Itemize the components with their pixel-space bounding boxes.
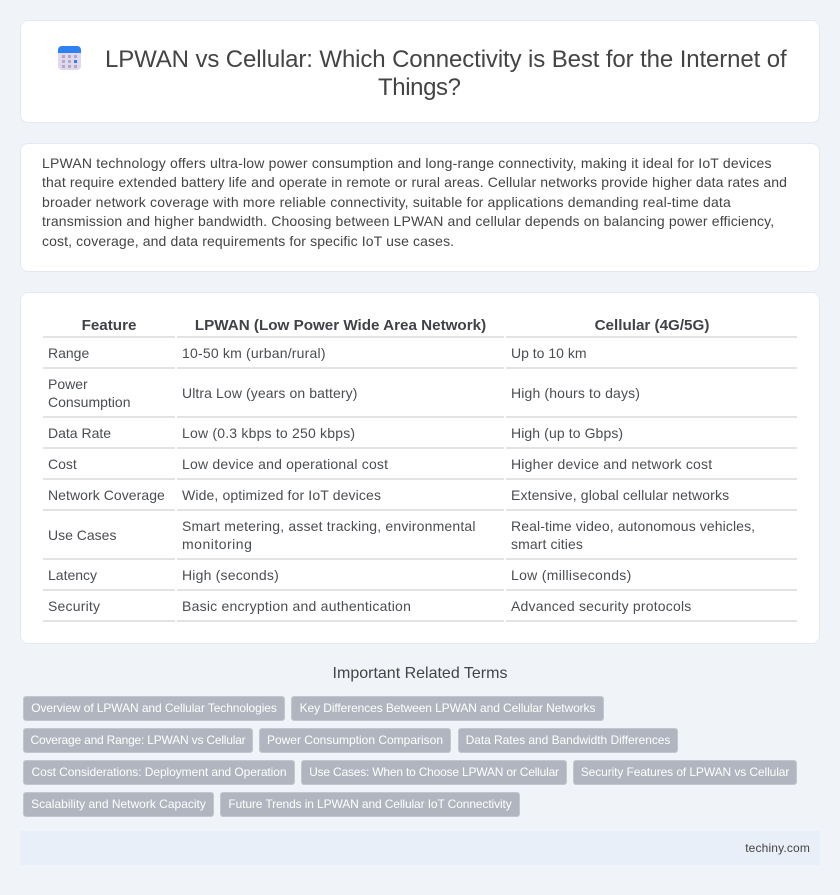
row: Latency: Latency [48, 567, 97, 583]
row: Range Cellular: Up to 10 km [511, 345, 586, 361]
row: Power Consumption [48, 376, 130, 410]
tag [23, 792, 214, 817]
footer bar [20, 831, 820, 865]
intro paragraph: that require extended battery life and operate in remote or rural areas. Cellular networks provide higher data rates and [42, 174, 787, 190]
tag: Cost Considerations: Deployment and Operation [32, 765, 286, 779]
panel: comparison table card [20, 292, 820, 644]
row: Data Rate Cellular: High (up to Gbps) [511, 425, 623, 441]
header: LPWAN: LPWAN (Low Power Wide Area Network) [195, 317, 486, 334]
tag: Key Differences Between LPWAN and Cellular Networks [300, 701, 595, 715]
tag: Power Consumption Comparison [267, 733, 443, 747]
row: Data Rate: Data Rate [48, 425, 111, 441]
intro paragraph [42, 155, 787, 249]
title: LPWAN vs Cellular: Which Connectivity is Best for the Internet of [105, 46, 787, 73]
tag: Future Trends in LPWAN and Cellular IoT Connectivity [228, 797, 512, 811]
tag [23, 696, 285, 721]
tag: Data Rates and Bandwidth Differences [466, 733, 670, 747]
row: Latency Cellular: Low (milliseconds) [511, 567, 632, 583]
icon: calendar [58, 46, 81, 70]
row: Security LPWAN: Basic encryption and authentication [182, 598, 411, 614]
row: Use Cases LPWAN: monitoring [182, 536, 252, 552]
row: Network LPWAN: Wide, optimized for IoT devices [182, 487, 381, 503]
row: Use Cases Cellular: smart cities [511, 536, 583, 552]
tag [291, 696, 604, 721]
header: Feature: Feature [82, 317, 136, 334]
row: Network Coverage: Network Coverage [48, 487, 165, 503]
row: Range LPWAN: 10-50 km (urban/rural) [182, 345, 326, 361]
row: Network Cellular: Extensive, global cellular networks [511, 487, 729, 503]
row: Security Cellular: Advanced security protocols [511, 598, 692, 614]
row: Latency LPWAN: High (seconds) [182, 567, 279, 583]
row: Use Cases LPWAN [182, 518, 476, 552]
comparison table [43, 317, 797, 622]
intro paragraph: transmission and higher bandwidth. Choosing between LPWAN and cellular depends on balancing power efficiency, [42, 213, 774, 229]
row: Cost: Cost [48, 456, 77, 472]
header: Cellular: Cellular (4G/5G) [595, 317, 709, 334]
row: Use Cases Cellular: Real-time video, autonomous vehicles, [511, 518, 755, 534]
row: Power Consumption: Power [48, 376, 88, 392]
tag [301, 760, 567, 785]
tag: Scalability and Network Capacity [31, 797, 206, 811]
row: Security: Security [48, 598, 100, 614]
row: Power LPWAN: Ultra Low (years on battery) [182, 385, 358, 401]
tag: Security Features of LPWAN vs Cellular [581, 765, 789, 779]
footer text: techiny.com [745, 841, 810, 855]
intro paragraph: cost, coverage, and data requirements for specific IoT use cases. [42, 233, 454, 249]
tag: Use Cases: When to Choose LPWAN or Cellular [309, 765, 559, 779]
tag [220, 792, 520, 817]
row: Data Rate LPWAN: Low (0.3 kbps to 250 kbps) [182, 425, 355, 441]
tag: Coverage and Range: LPWAN vs Cellular [31, 733, 245, 747]
row: Use Cases Cellular [511, 518, 755, 552]
row: Cost Cellular: Higher device and network cost [511, 456, 712, 472]
title: Things? [378, 74, 461, 101]
intro paragraph: broader network coverage with more reliable connectivity, suitable for applications demanding real-time data [42, 194, 731, 210]
row: Use Cases LPWAN: Smart metering, asset tracking, environmental [182, 518, 476, 534]
row: Use Cases: Use Cases [48, 527, 116, 543]
related terms heading: Important Related Terms [333, 665, 507, 682]
row: Cost LPWAN: Low device and operational cost [182, 456, 388, 472]
row: Power Consumption: Consumption [48, 394, 130, 410]
tag [259, 728, 451, 753]
tag [23, 728, 253, 753]
row: Range: Range [48, 345, 89, 361]
intro paragraph: LPWAN technology offers ultra-low power consumption and long-range connectivity, making it ideal for IoT devices [42, 155, 772, 171]
tag [573, 760, 797, 785]
title [105, 46, 787, 101]
panel: title card [20, 20, 820, 123]
panel: intro text card [20, 143, 820, 272]
tag [458, 728, 678, 753]
row: Power Cellular: High (hours to days) [511, 385, 640, 401]
tag: Overview of LPWAN and Cellular Technologies [31, 701, 277, 715]
tag [23, 760, 295, 785]
